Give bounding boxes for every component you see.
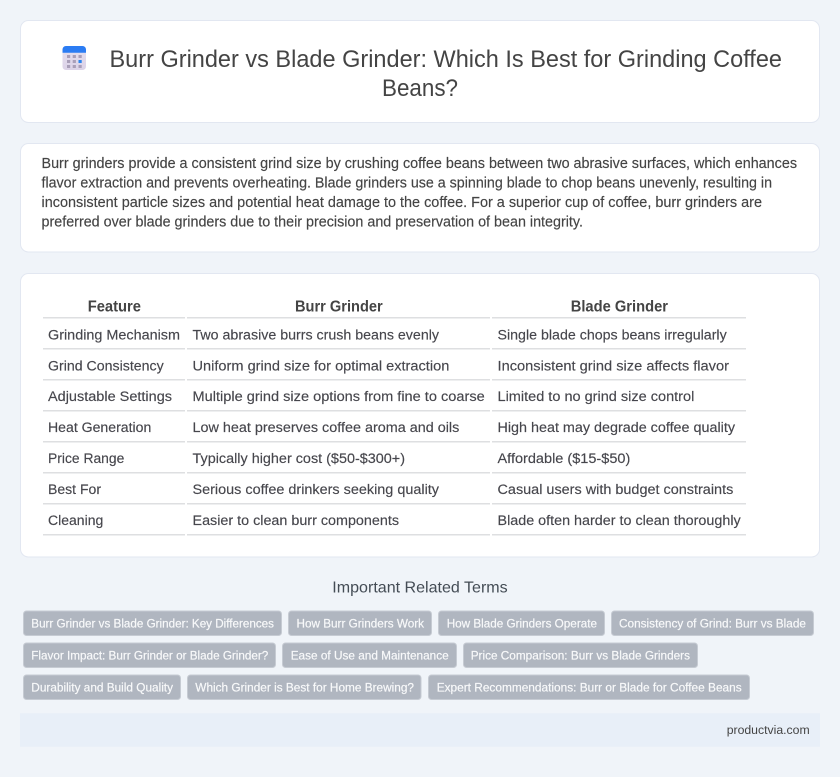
tag	[282, 643, 456, 668]
text block: intro: inconsistent particle sizes and potential heat damage to the coffee. For a superior cup of coffee, burr grinders are	[42, 195, 762, 211]
row: grind consistency: Grind Consistency	[48, 358, 165, 374]
panel: intro paragraph	[20, 144, 820, 252]
text block: intro	[42, 156, 797, 230]
tag	[464, 643, 698, 668]
row: best for: Serious coffee drinkers seeking quality	[192, 482, 440, 498]
row: grinding mechanism: Two abrasive burrs crush beans evenly	[192, 327, 440, 343]
tag	[188, 675, 421, 700]
row: grind consistency: Inconsistent grind size affects flavor	[498, 358, 729, 374]
row: best for: Casual users with budget constraints	[498, 482, 733, 498]
row: price range	[48, 451, 630, 467]
tag: Expert Recommendations: Burr or Blade for Coffee Beans	[437, 680, 742, 694]
title	[110, 46, 782, 102]
related term tags	[24, 611, 814, 700]
row: cleaning	[48, 513, 742, 529]
row: grind consistency: Uniform grind size for optimal extraction	[192, 358, 449, 374]
row: adjustable settings: Adjustable Settings	[48, 389, 172, 405]
row: price range: Affordable ($15-$50)	[498, 451, 630, 467]
footer bar	[20, 713, 820, 747]
table header: Burr Grinder	[295, 299, 383, 316]
row: heat generation: High heat may degrade coffee quality	[498, 420, 736, 436]
row: adjustable settings: Multiple grind size options from fine to coarse	[192, 389, 485, 405]
tag: Burr Grinder vs Blade Grinder: Key Differences	[31, 616, 274, 630]
footer credit: productvia.com	[727, 723, 810, 737]
row: cleaning: Blade often harder to clean thoroughly	[498, 513, 742, 529]
tag	[24, 675, 180, 700]
tag: Consistency of Grind: Burr vs Blade	[619, 616, 806, 630]
row: adjustable settings	[48, 389, 694, 405]
tag: How Blade Grinders Operate	[447, 616, 597, 630]
row: grinding mechanism	[48, 327, 728, 343]
table header: Feature	[88, 299, 141, 316]
table header: Blade Grinder	[571, 299, 668, 316]
tag: Price Comparison: Burr vs Blade Grinders	[471, 648, 690, 662]
row: best for	[48, 482, 733, 498]
row: heat generation: Heat Generation	[48, 420, 151, 436]
row: grind consistency	[48, 358, 729, 374]
title: Beans?	[382, 75, 458, 102]
tag	[612, 611, 814, 636]
row: cleaning: Cleaning	[48, 513, 103, 529]
tag	[24, 611, 282, 636]
tag: Flavor Impact: Burr Grinder or Blade Grinder?	[31, 648, 269, 662]
tag	[428, 675, 750, 700]
heading: related terms: Important Related Terms	[332, 580, 508, 597]
tag: Durability and Build Quality	[31, 680, 174, 694]
tag	[24, 643, 276, 668]
panel: comparison table	[20, 274, 820, 557]
row: grinding mechanism: Grinding Mechanism	[48, 327, 180, 343]
icon: calendar	[62, 46, 86, 70]
row: adjustable settings: Limited to no grind size control	[498, 389, 694, 405]
title: Burr Grinder vs Blade Grinder: Which Is Best for Grinding Coffee	[110, 46, 782, 73]
text block: intro: Burr grinders provide a consistent grind size by crushing coffee beans between two abrasive surfaces, which enhances	[42, 156, 797, 172]
text block: intro: preferred over blade grinders due to their precision and preservation of bean integrity.	[42, 214, 583, 230]
row: grinding mechanism: Single blade chops beans irregularly	[498, 327, 728, 343]
text block: intro: flavor extraction and prevents overheating. Blade grinders use a spinning blade to chop beans unevenly, resulting in	[42, 176, 772, 192]
row: price range: Price Range	[48, 451, 124, 467]
row: cleaning: Easier to clean burr components	[192, 513, 399, 529]
row: heat generation	[48, 420, 736, 436]
panel: header	[20, 20, 820, 122]
tag	[438, 611, 604, 636]
table header	[88, 299, 668, 316]
tag	[288, 611, 432, 636]
tag: How Burr Grinders Work	[296, 616, 425, 630]
tag: Which Grinder is Best for Home Brewing?	[195, 680, 414, 694]
row: best for: Best For	[48, 482, 101, 498]
row: price range: Typically higher cost ($50-$300+)	[192, 451, 405, 467]
row: heat generation: Low heat preserves coffee aroma and oils	[192, 420, 459, 436]
tag: Ease of Use and Maintenance	[291, 648, 449, 662]
